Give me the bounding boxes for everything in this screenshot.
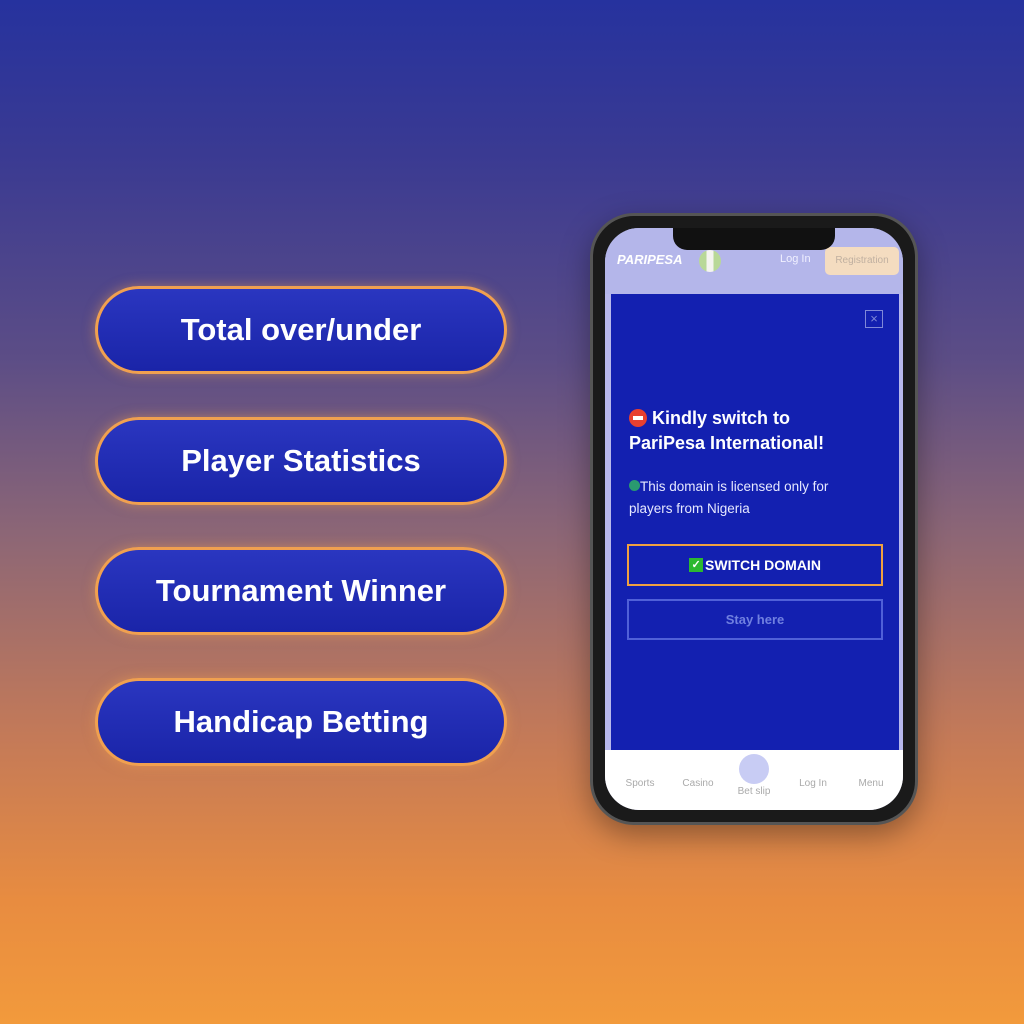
registration button	[825, 247, 899, 275]
nav: log in: Log In	[799, 778, 827, 789]
stay here button: Stay here	[726, 612, 784, 627]
close icon	[865, 310, 883, 328]
close icon: ×	[870, 311, 878, 326]
pill: Handicap Betting	[95, 678, 507, 766]
bottom nav	[605, 750, 903, 810]
login link: Log In	[780, 253, 811, 265]
pill: Player Statistics	[95, 417, 507, 505]
modal heading: Kindly switch to	[652, 408, 790, 428]
switch domain button: ✓	[691, 559, 701, 571]
switch domain button	[627, 544, 883, 586]
phone mockup	[590, 213, 918, 825]
logo: PARIPESA	[617, 252, 682, 267]
header bar	[605, 228, 903, 294]
nav: bet slip	[739, 754, 769, 784]
pill: Tournament Winner: Tournament Winner	[156, 573, 446, 608]
bottom nav: Bet slip	[738, 786, 770, 797]
flag icon	[699, 250, 721, 272]
switch domain button: SWITCH DOMAIN	[705, 557, 821, 573]
pill: Handicap Betting: Handicap Betting	[174, 704, 428, 739]
modal text: This domain is licensed only for	[640, 479, 828, 494]
nav: casino: Casino	[682, 778, 714, 789]
modal text: players from Nigeria	[629, 501, 750, 516]
notch	[673, 226, 835, 250]
modal text	[629, 479, 828, 516]
nav: menu: Menu	[858, 778, 884, 789]
nav: sports: Sports	[626, 778, 654, 789]
pill: Tournament Winner	[95, 547, 507, 635]
registration button: Registration	[835, 255, 889, 266]
pill: Total over/under	[95, 286, 507, 374]
stay here button	[627, 599, 883, 640]
pill: Total over/under: Total over/under	[181, 312, 421, 347]
pill: Player Statistics: Player Statistics	[181, 443, 421, 478]
modal heading: PariPesa International!	[629, 433, 824, 453]
modal heading	[629, 408, 824, 453]
modal	[611, 294, 899, 750]
screen	[605, 228, 903, 810]
